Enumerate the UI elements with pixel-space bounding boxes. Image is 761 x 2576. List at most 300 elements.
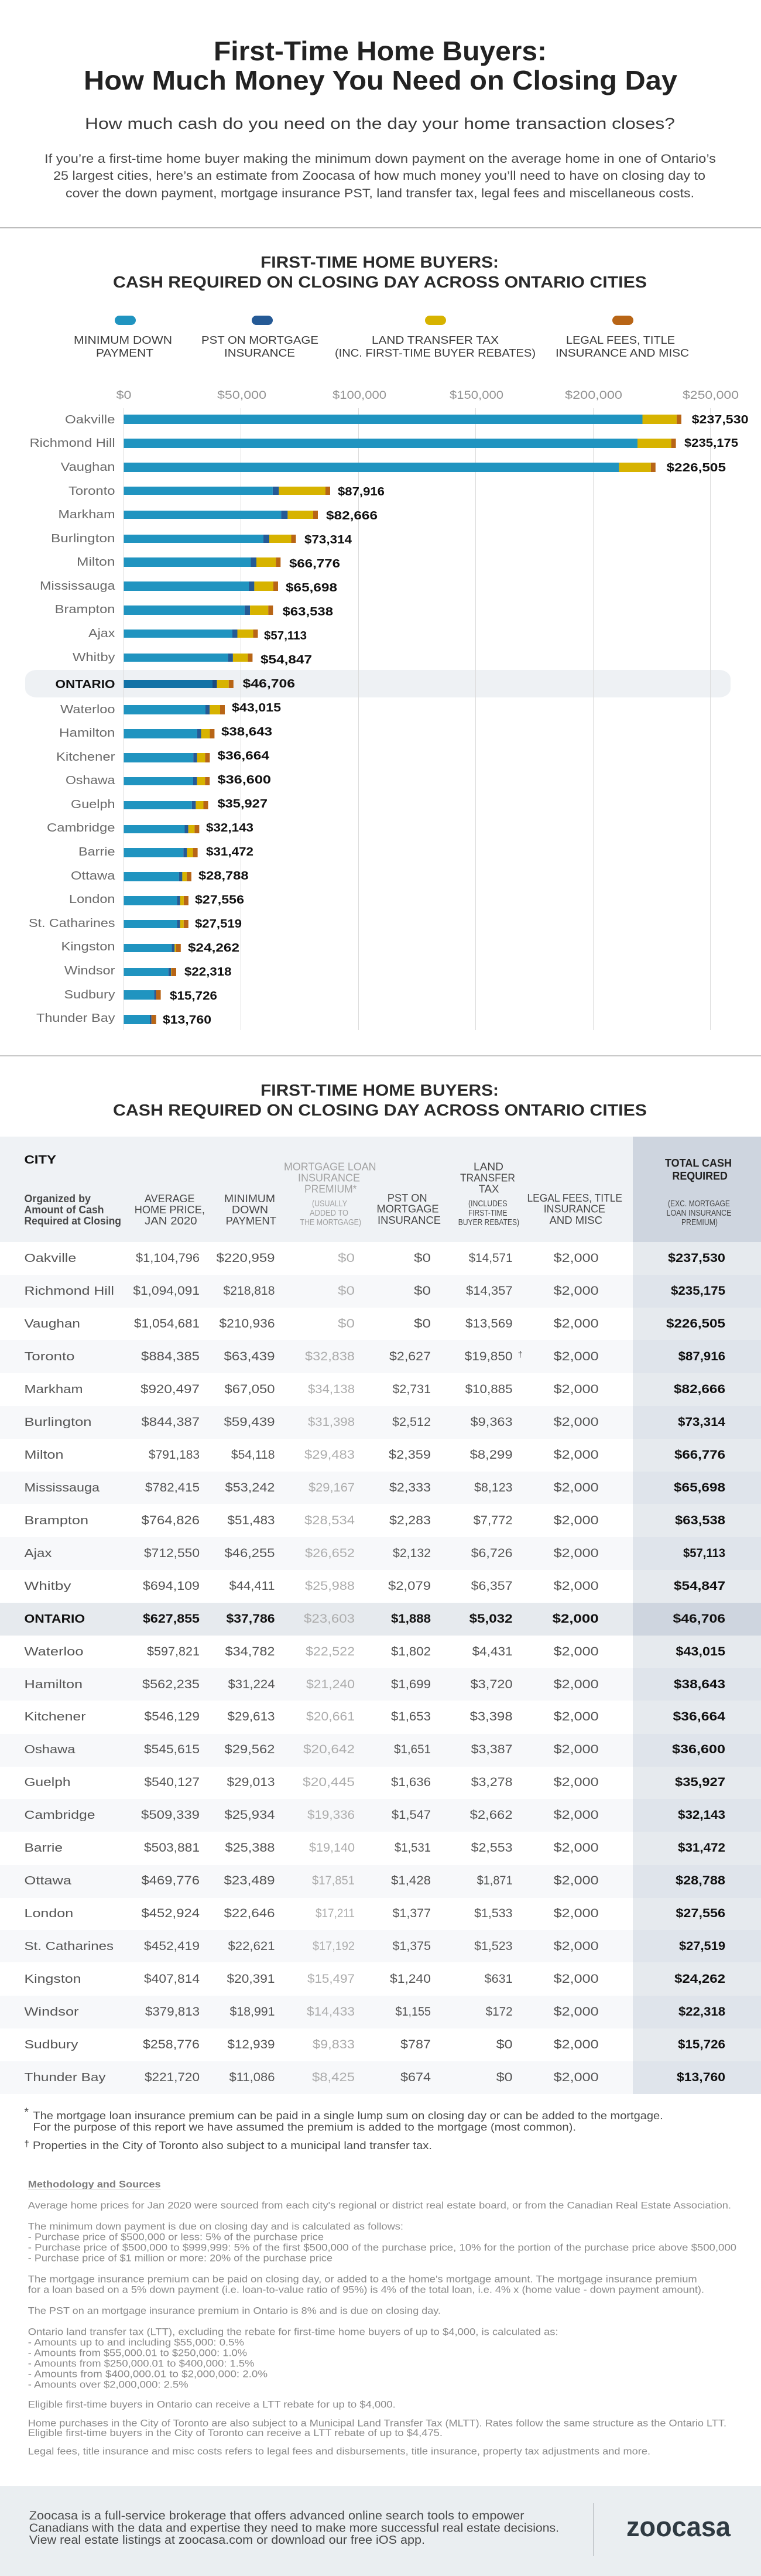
column header: city: CITY (25, 1153, 56, 1166)
column header: average home price: JAN 2020 (145, 1215, 197, 1227)
row: Barrie: $1,531 (395, 1841, 431, 1855)
row: Milton: $2,359 (389, 1448, 431, 1462)
row: Markham: $10,885 (465, 1382, 513, 1396)
row: Whitby: $6,357 (471, 1579, 513, 1593)
row: Toronto: $2,000 (554, 1349, 599, 1363)
row: Oakville: $237,530 (668, 1251, 725, 1265)
bar: Windsor: Windsor (64, 964, 115, 977)
row: Oakville: $0 (338, 1251, 355, 1265)
methodology text: for a loan based on a 5% down payment (i.e. loan-to-value ratio of 95%) is 4% of the total loan, i.e. 4% x (home value - down payment amount). (28, 2285, 704, 2296)
row: Markham (0, 1373, 761, 1407)
row: Guelph: $2,000 (554, 1775, 599, 1789)
intro paragraph: If you’re a first-time home buyer making the minimum down payment on the average home in one of Ontario’s (44, 152, 716, 166)
row: Sudbury: $2,000 (554, 2037, 599, 2051)
row: Burlington: $73,314 (678, 1415, 725, 1429)
row: St. Catharines: $1,375 (392, 1939, 431, 1953)
row: Waterloo: $22,522 (306, 1644, 355, 1658)
row: Barrie: $19,140 (309, 1841, 355, 1855)
methodology text: Average home prices for Jan 2020 were sourced from each city's regional or district real estate board, or from the Canadian Real Estate Association. (28, 2201, 731, 2211)
row: London: $17,211 (316, 1906, 355, 1920)
title: How Much Money You Need on Closing Day (84, 65, 677, 95)
row: Sudbury: $258,776 (143, 2037, 200, 2051)
row: St. Catharines: $17,192 (313, 1939, 355, 1953)
row: Burlington: $31,398 (308, 1415, 355, 1429)
row: Toronto: $87,916 (678, 1349, 725, 1363)
row: Richmond Hill: $0 (414, 1284, 431, 1298)
x axis labels: $200,000 (565, 389, 622, 402)
bar: Oshawa: Oshawa (66, 774, 115, 787)
row: Hamilton: $1,699 (391, 1677, 431, 1691)
row: Toronto: Toronto (25, 1350, 75, 1363)
footnotes: * (25, 2106, 29, 2119)
bar: Vaughan (61, 460, 726, 474)
bar: Brampton: $63,538 (283, 605, 333, 618)
legend item: PST on mortgage insurance: INSURANCE (224, 347, 295, 359)
footer about text: Zoocasa is a full-service brokerage that offers advanced online search tools to empower (29, 2509, 525, 2523)
row: Thunder Bay: $8,425 (312, 2070, 355, 2084)
row: Hamilton: $31,224 (228, 1677, 275, 1691)
row: Kitchener: Kitchener (25, 1710, 86, 1723)
row: Ottawa: $1,871 (477, 1873, 513, 1887)
panel: data table section (0, 1081, 761, 2151)
row: Mississauga: $53,242 (225, 1480, 275, 1494)
row: Windsor: $14,433 (307, 2004, 355, 2019)
row: St. Catharines: $452,419 (144, 1939, 200, 1953)
column header: legal fees (527, 1192, 622, 1226)
row: Ottawa: $2,000 (554, 1873, 599, 1887)
row: Guelph: Guelph (25, 1776, 70, 1789)
methodology and sources (28, 2180, 736, 2457)
row: Guelph: $29,013 (227, 1775, 275, 1789)
row: Ajax: Ajax (25, 1547, 52, 1560)
column header: PST on mortgage insurance (377, 1192, 441, 1226)
bar: Waterloo: Waterloo (60, 703, 115, 716)
bar: Brampton (55, 603, 333, 618)
row: Thunder Bay: $0 (496, 2070, 513, 2084)
bar: St. Catharines (29, 916, 242, 930)
row: Hamilton: $38,643 (674, 1677, 725, 1691)
column header: city: Amount of Cash (25, 1203, 104, 1216)
column header: legal fees: AND MISC (550, 1214, 602, 1226)
row: Kingston: $15,497 (307, 1972, 355, 1986)
row: Ontario: $46,706 (673, 1612, 725, 1626)
bar chart rows (29, 413, 749, 1027)
bar: Markham: $82,666 (326, 509, 378, 522)
row: Thunder Bay: Thunder Bay (25, 2071, 106, 2084)
row: Ontario: $5,032 (469, 1612, 513, 1626)
row: Burlington: Burlington (25, 1415, 91, 1429)
row: Windsor: $18,991 (229, 2004, 275, 2019)
column header: total cash required: TOTAL CASH (665, 1157, 732, 1170)
row: Oshawa: $20,642 (303, 1742, 355, 1756)
row: Brampton (0, 1504, 761, 1538)
row: Markham: $67,050 (225, 1382, 275, 1396)
row: Barrie: $503,881 (144, 1841, 200, 1855)
row: Oakville (0, 1242, 761, 1275)
methodology text: - Purchase price of $1 million or more: 20% of the purchase price (28, 2253, 332, 2264)
column header: PST on mortgage insurance: PST ON (388, 1192, 427, 1204)
methodology text: - Purchase price of $500,000 to $999,999: 5% of the first $500,000 of the purchase price, 10% for the portion of the purchase price above $500,000 (28, 2243, 736, 2253)
column header: PST on mortgage insurance: MORTGAGE (377, 1203, 439, 1215)
row: Ajax: $712,550 (144, 1546, 200, 1560)
bar: Ontario: ONTARIO (55, 678, 115, 691)
row: Kitchener: $2,000 (554, 1709, 599, 1723)
row: Barrie: $2,000 (554, 1841, 599, 1855)
row: Kitchener: $29,613 (227, 1709, 275, 1723)
row: Brampton: $63,538 (675, 1513, 725, 1527)
bar: Guelph (71, 797, 268, 811)
row: Mississauga (0, 1472, 761, 1505)
row: London (0, 1898, 761, 1931)
row: Whitby: $2,079 (388, 1579, 431, 1593)
row: Oakville: $0 (414, 1251, 431, 1265)
row: Burlington (0, 1406, 761, 1439)
bar: Thunder Bay: Thunder Bay (36, 1011, 115, 1025)
row: Kitchener: $20,661 (306, 1709, 355, 1723)
row: Kitchener (0, 1701, 761, 1734)
column header: mortgage loan insurance premium: INSURANCE (298, 1172, 360, 1184)
row: Ottawa: $28,788 (676, 1873, 725, 1887)
row: Burlington: $59,439 (224, 1415, 275, 1429)
row: Sudbury: Sudbury (25, 2038, 78, 2051)
row: Mississauga: $29,167 (308, 1480, 355, 1494)
logo: zoocasa: zoocasa (626, 2511, 731, 2542)
bar: St. Catharines: St. Catharines (29, 916, 115, 930)
column header: land transfer tax: LAND (474, 1161, 503, 1173)
bar: Guelph: Guelph (71, 798, 115, 811)
column header: legal fees: LEGAL FEES, TITLE (527, 1192, 622, 1204)
row: Ontario: $627,855 (143, 1612, 200, 1626)
legend (74, 316, 689, 359)
chart heading: FIRST-TIME HOME BUYERS: (260, 253, 499, 271)
bar: Mississauga: Mississauga (40, 579, 115, 593)
header: title block (44, 36, 716, 200)
row: Guelph (0, 1767, 761, 1800)
row: Richmond Hill (0, 1275, 761, 1308)
row: Kitchener: $1,653 (391, 1709, 431, 1723)
bar: Milton: $66,776 (289, 557, 340, 570)
row: Mississauga: $8,123 (474, 1480, 513, 1494)
row: London: $27,556 (676, 1906, 725, 1920)
row: St. Catharines: $2,000 (554, 1939, 599, 1953)
x axis labels: $50,000 (217, 389, 266, 402)
bar: Ontario: $46,706 (243, 677, 295, 690)
table heading (113, 1081, 647, 1119)
row: Whitby: $44,411 (229, 1579, 275, 1593)
row: Brampton: Brampton (25, 1514, 88, 1527)
bar: Sudbury (64, 988, 217, 1003)
bar: Thunder Bay (36, 1011, 211, 1027)
column header: city: Organized by (25, 1192, 91, 1205)
row: Hamilton: $2,000 (554, 1677, 599, 1691)
row: St. Catharines: $22,621 (228, 1939, 275, 1953)
column header: total cash required (665, 1157, 732, 1227)
legend item: minimum down payment: MINIMUM DOWN (74, 334, 172, 346)
row: Markham: Markham (25, 1383, 83, 1396)
row: Windsor: Windsor (25, 2005, 79, 2019)
row: Richmond Hill: Richmond Hill (25, 1284, 114, 1298)
bar: Ajax (88, 627, 307, 642)
row: Toronto: $884,385 (141, 1349, 200, 1363)
row: Brampton: $2,000 (554, 1513, 599, 1527)
bar: Cambridge (47, 821, 253, 834)
bar: Kitchener: $36,664 (218, 749, 270, 762)
bar: Waterloo: $43,015 (232, 701, 281, 714)
row: Barrie: $31,472 (678, 1841, 725, 1855)
column header: average home price: AVERAGE (145, 1192, 194, 1205)
column header: land transfer tax: FIRST-TIME (468, 1208, 507, 1218)
column header: land transfer tax: BUYER REBATES) (458, 1217, 519, 1227)
row: Milton: $66,776 (674, 1448, 725, 1462)
column header: minimum down payment: PAYMENT (226, 1215, 276, 1227)
table heading: FIRST-TIME HOME BUYERS: (260, 1081, 499, 1099)
bar: Sudbury: Sudbury (64, 988, 115, 1001)
legend item: land transfer tax: (INC. FIRST-TIME BUYER REBATES) (335, 347, 536, 359)
row: Milton (0, 1439, 761, 1472)
row: Windsor: $172 (486, 2004, 513, 2019)
row: Richmond Hill: $0 (338, 1284, 355, 1298)
row: Cambridge: $509,339 (141, 1808, 200, 1822)
column header: total cash required: (EXC. MORTGAGE (668, 1199, 730, 1209)
column header: total cash required: PREMIUM) (681, 1217, 718, 1227)
row: St. Catharines: $27,519 (679, 1939, 725, 1953)
methodology heading: Methodology and Sources (28, 2180, 161, 2190)
row: Thunder Bay: $674 (400, 2070, 431, 2084)
column header: average home price: HOME PRICE, (135, 1203, 205, 1216)
x axis labels: $250,000 (683, 389, 739, 402)
bar: Windsor: $22,318 (184, 965, 232, 979)
bar: Mississauga (40, 579, 337, 594)
bar: Hamilton: Hamilton (59, 726, 115, 740)
row: Oshawa: $1,651 (394, 1742, 431, 1756)
column header: total cash required: LOAN INSURANCE (666, 1208, 732, 1218)
bar: Oakville: $237,530 (692, 413, 749, 426)
row: Ontario: $37,786 (226, 1612, 275, 1626)
row: Oshawa (0, 1734, 761, 1767)
bar: Richmond Hill (30, 436, 738, 450)
bar: London: $27,556 (195, 893, 244, 906)
bar: Kingston: $24,262 (188, 941, 239, 955)
bar: Ajax: Ajax (88, 627, 115, 640)
row: Toronto (0, 1340, 761, 1374)
row: Toronto: $2,627 (389, 1349, 431, 1363)
row: Windsor (0, 1996, 761, 2028)
bar: Richmond Hill: Richmond Hill (30, 436, 115, 450)
row: Cambridge: $2,662 (470, 1808, 513, 1822)
row: Vaughan: $1,054,681 (134, 1316, 200, 1330)
intro paragraph: cover the down payment, mortgage insurance PST, land transfer tax, legal fees and miscellaneous costs. (66, 187, 694, 200)
legend item: land transfer tax (335, 316, 536, 359)
row: Milton: $791,183 (149, 1448, 200, 1462)
footnotes: The mortgage loan insurance premium can be paid in a single lump sum on closing day or can be added to the mortgage. (33, 2110, 663, 2122)
row: Cambridge (0, 1799, 761, 1832)
legend item: legal fees (556, 316, 689, 359)
legend item: minimum down payment (74, 316, 172, 359)
row: Milton: $54,118 (231, 1448, 275, 1462)
row: Waterloo: $1,802 (391, 1644, 431, 1658)
row: Barrie: $2,553 (471, 1841, 513, 1855)
row: Ajax: $57,113 (683, 1546, 725, 1560)
row: Brampton: $51,483 (227, 1513, 275, 1527)
footnotes: For the purpose of this report we have assumed the premium is added to the mortgage (most common). (33, 2121, 576, 2133)
row: Ottawa (0, 1865, 761, 1898)
row: Sudbury: $9,833 (313, 2037, 355, 2051)
column header: land transfer tax: (INCLUDES (468, 1199, 507, 1209)
row: St. Catharines: St. Catharines (25, 1939, 114, 1953)
row: Ajax: $2,132 (393, 1546, 431, 1560)
row: Markham: $2,731 (392, 1382, 431, 1396)
row: London: $452,924 (142, 1906, 200, 1920)
x axis labels: $150,000 (450, 389, 503, 402)
row: Ajax: $26,652 (305, 1546, 355, 1560)
column header: PST on mortgage insurance: INSURANCE (378, 1214, 441, 1226)
row: Guelph: $35,927 (675, 1775, 725, 1789)
row: Oakville: Oakville (25, 1251, 76, 1265)
bar: Burlington: Burlington (51, 532, 115, 545)
row: Ottawa: Ottawa (25, 1874, 72, 1887)
methodology text: Home purchases in the City of Toronto are also subject to a Municipal Land Transfer Tax (MLTT). Rates follow the same structure as the Ontario LTT. (28, 2418, 726, 2428)
row: Richmond Hill: $14,357 (466, 1284, 513, 1298)
bar: Oshawa (66, 773, 271, 787)
table heading: CASH REQUIRED ON CLOSING DAY ACROSS ONTARIO CITIES (113, 1101, 647, 1119)
row: Windsor: $1,155 (396, 2004, 431, 2019)
footnotes (25, 2106, 663, 2151)
methodology text: - Amounts from $250,000.01 to $400,000: 1.5% (28, 2359, 255, 2369)
row: Whitby: $2,000 (554, 1579, 599, 1593)
footnotes: † (25, 2139, 29, 2149)
row: Markham: $2,000 (554, 1382, 599, 1396)
bar: Ottawa: $28,788 (198, 869, 248, 882)
row: Guelph: $20,445 (303, 1775, 355, 1789)
methodology text (28, 2201, 736, 2457)
row: Ajax: $46,255 (225, 1546, 275, 1560)
row: Oshawa: Oshawa (25, 1743, 76, 1756)
row: St. Catharines (0, 1930, 761, 1963)
row: London: London (25, 1907, 73, 1920)
methodology text: - Purchase price of $500,000 or less: 5% of the purchase price (28, 2232, 324, 2243)
row: Milton: Milton (25, 1448, 63, 1462)
column header: minimum down payment: MINIMUM (224, 1192, 275, 1205)
row: Toronto: $32,838 (305, 1349, 355, 1363)
bar: London (69, 892, 244, 906)
column header: mortgage loan insurance premium: ADDED TO (310, 1208, 348, 1218)
column header: mortgage loan insurance premium: (USUALLY (312, 1199, 347, 1209)
row: Ontario: $1,888 (391, 1612, 431, 1626)
row: Thunder Bay: $13,760 (677, 2070, 725, 2084)
row: Ottawa: $1,428 (391, 1873, 431, 1887)
column header: land transfer tax (458, 1161, 519, 1227)
footnotes: Properties in the City of Toronto also subject to a municipal land transfer tax. (33, 2140, 432, 2151)
row: St. Catharines: $1,523 (474, 1939, 513, 1953)
column header: city (25, 1153, 121, 1227)
column header: mortgage loan insurance premium: THE MORTGAGE) (300, 1217, 361, 1227)
row: Richmond Hill: $218,818 (224, 1284, 275, 1298)
row: Vaughan: $210,936 (219, 1316, 275, 1330)
row: Ajax: $6,726 (471, 1546, 513, 1560)
methodology text: Eligible first-time buyers in the City of Toronto can receive a LTT rebate of up to $4,475. (28, 2428, 443, 2438)
title: First-Time Home Buyers: (214, 36, 547, 66)
methodology text: Eligible first-time buyers in Ontario can receive a LTT rebate for up to $4,000. (28, 2400, 396, 2410)
bar: Barrie: $31,472 (206, 845, 253, 858)
row: Sudbury: $15,726 (678, 2037, 725, 2051)
row: Markham: $82,666 (674, 1382, 725, 1396)
table header row (0, 1137, 761, 1242)
row: Hamilton: $3,720 (471, 1677, 513, 1691)
row: Hamilton: Hamilton (25, 1678, 83, 1691)
bar: Vaughan: $226,505 (666, 461, 726, 474)
footer about text: View real estate listings at zoocasa.com or download our free iOS app. (29, 2533, 425, 2547)
row: Thunder Bay: $11,086 (229, 2070, 275, 2084)
methodology text: - Amounts up to and including $55,000: 0.5% (28, 2338, 244, 2348)
row: Barrie: Barrie (25, 1841, 63, 1855)
bar: St. Catharines: $27,519 (195, 917, 242, 930)
row: Whitby: $694,109 (143, 1579, 200, 1593)
row: Hamilton: $562,235 (142, 1677, 200, 1691)
row: Kingston: $20,391 (227, 1972, 275, 1986)
row: Brampton: $28,534 (304, 1513, 355, 1527)
row: Waterloo: $597,821 (147, 1644, 200, 1658)
row: Kingston: $2,000 (554, 1972, 599, 1986)
bar: Ajax: $57,113 (264, 629, 307, 642)
row: Cambridge: $1,547 (392, 1808, 431, 1822)
row: Hamilton: $21,240 (306, 1677, 355, 1691)
row: Guelph: $1,636 (391, 1775, 431, 1789)
row: Sudbury (0, 2028, 761, 2061)
chart heading: CASH REQUIRED ON CLOSING DAY ACROSS ONTARIO CITIES (113, 273, 647, 291)
row: Waterloo: $43,015 (676, 1644, 725, 1658)
row: Milton: $8,299 (470, 1448, 513, 1462)
row: Brampton: $764,826 (142, 1513, 200, 1527)
row: Cambridge: $2,000 (554, 1808, 599, 1822)
row: Kingston (0, 1962, 761, 1996)
highlight band: Ontario (25, 670, 731, 697)
row: Brampton: $2,283 (389, 1513, 431, 1527)
row: Burlington: $2,000 (554, 1415, 599, 1429)
bar: Hamilton (59, 725, 272, 740)
bar: Toronto: Toronto (68, 484, 115, 498)
row: Oshawa: $29,562 (225, 1742, 275, 1756)
row: Cambridge: $19,336 (307, 1808, 355, 1822)
subtitle: How much cash do you need on the day your home transaction closes? (85, 115, 675, 132)
methodology text: - Amounts over $2,000,000: 2.5% (28, 2380, 188, 2390)
column header: city: Required at Closing (25, 1215, 121, 1227)
row: Oakville: $14,571 (469, 1251, 513, 1265)
column header: mortgage loan insurance premium (284, 1161, 376, 1227)
row: Oakville: $1,104,796 (136, 1251, 200, 1265)
row: Markham: $34,138 (308, 1382, 355, 1396)
row: Mississauga: $65,698 (674, 1480, 725, 1494)
panel: footer (0, 2486, 761, 2576)
row: Ottawa: $23,489 (224, 1873, 275, 1887)
bar: Markham: Markham (59, 508, 115, 521)
bar: Sudbury: $15,726 (170, 989, 217, 1003)
row: London: $1,533 (474, 1906, 513, 1920)
methodology text: The mortgage insurance premium can be paid on closing day, or added to a the home's mortgage amount. The mortgage insurance premium (28, 2274, 697, 2285)
row: Milton: $2,000 (554, 1448, 599, 1462)
bar: London: London (69, 892, 115, 906)
chart heading (113, 253, 647, 291)
legend item: land transfer tax: LAND TRANSFER TAX (372, 334, 499, 346)
row: Waterloo: Waterloo (25, 1645, 83, 1658)
row: Ontario: $23,603 (304, 1612, 355, 1626)
row: Whitby: Whitby (25, 1579, 71, 1593)
table rows (0, 1242, 761, 2094)
footer about text (29, 2509, 559, 2547)
row: Mississauga: $782,415 (145, 1480, 200, 1494)
row: Mississauga: $2,000 (554, 1480, 599, 1494)
bar: Ottawa (71, 869, 248, 882)
row: Oshawa: $2,000 (554, 1742, 599, 1756)
